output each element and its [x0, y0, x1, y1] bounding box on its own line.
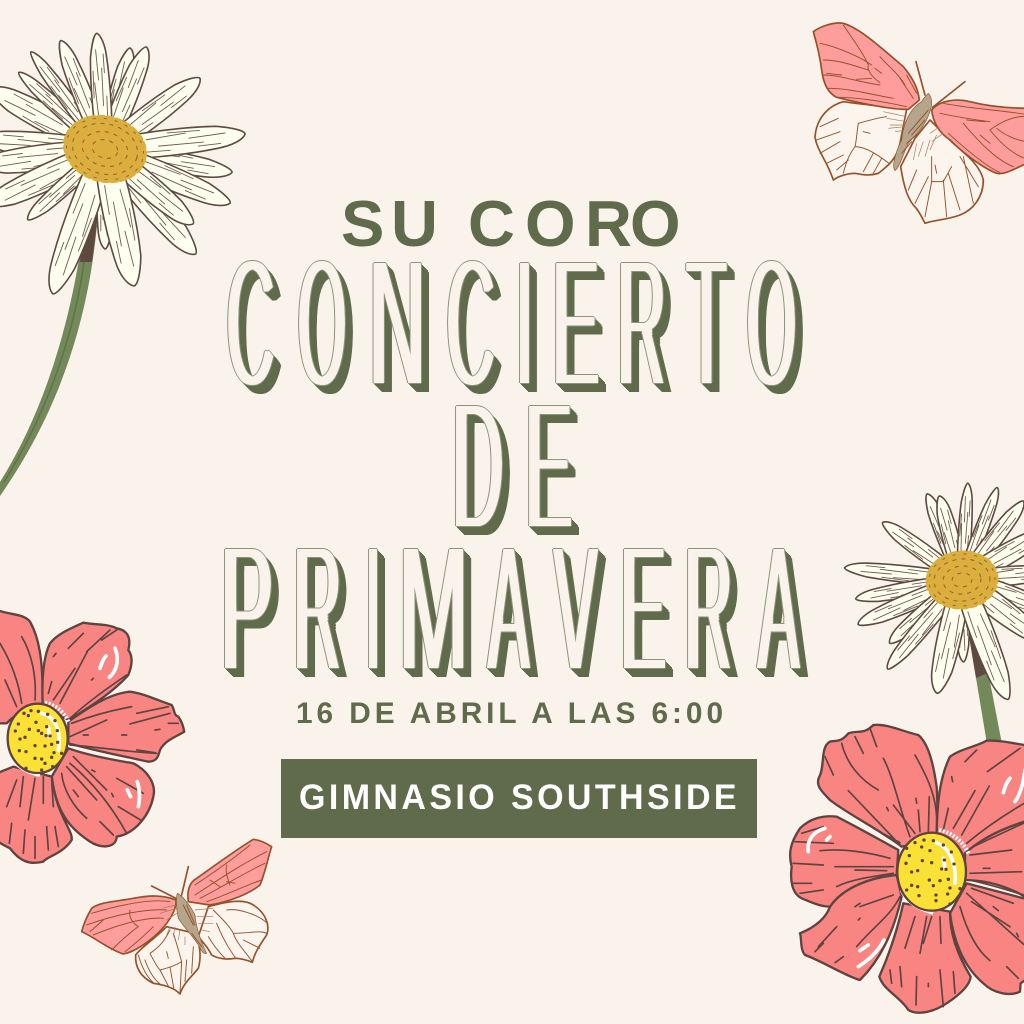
body: top butterfly: [894, 93, 932, 171]
date line: 16 DE ABRIL A LAS 6:00: [296, 697, 727, 730]
flower center: right daisy: [926, 550, 998, 610]
title line: CONCIERTO: C: [227, 221, 275, 426]
wing veins: bottom butterfly: [87, 845, 267, 993]
title line: PRIMAVERA: R: [685, 506, 732, 710]
wings: top butterfly: [813, 23, 1024, 223]
title line: PRIMAVERA: M: [399, 506, 468, 710]
title line: PRIMAVERA: E: [620, 508, 666, 711]
small heading: SU CORO: C: [468, 187, 515, 260]
fuzz: top butterfly: [883, 112, 943, 160]
daisy top left with stem: [0, 33, 247, 496]
title line: CONCIERTO: T: [687, 222, 726, 426]
daisy right with stem: [844, 483, 1024, 744]
red flower left: [0, 610, 184, 863]
flower center: top-left daisy: [58, 109, 152, 189]
petal veins: bottom-right flower: [793, 728, 1024, 1007]
title line: PRIMAVERA: I: [367, 507, 379, 710]
title line: CONCIERTO: O: [298, 220, 346, 425]
butterfly top right: [813, 23, 1024, 223]
fuzz: bottom butterfly: [160, 905, 213, 945]
highlights: bottom-right flower: [808, 770, 1024, 967]
title line: CONCIERTO: E: [552, 222, 599, 426]
title line: CONCIERTO: C: [447, 221, 495, 426]
small heading: SU CORO: U: [391, 187, 438, 260]
wings: bottom butterfly: [82, 839, 272, 994]
title line: PRIMAVERA: A: [758, 506, 799, 710]
small heading: SU CORO: R: [585, 187, 632, 260]
small heading: SU CORO: O: [525, 187, 576, 260]
small heading: SU CORO: O: [630, 187, 681, 260]
main title: CONCIERTO DE PRIMAVERA: [220, 220, 799, 711]
title line: CONCIERTO: I: [517, 220, 532, 425]
title line: CONCIERTO: [227, 220, 796, 426]
title line: DE: E: [525, 365, 572, 569]
title line: DE: [452, 364, 572, 569]
title line: CONCIERTO: O: [747, 222, 796, 426]
highlights: left flower: [100, 648, 139, 807]
petals: right daisy: [844, 483, 1024, 704]
red flower bottom right: [790, 725, 1024, 1013]
title line: PRIMAVERA: V: [554, 506, 597, 710]
title line: PRIMAVERA: R: [294, 506, 341, 710]
stem: top-left daisy: [0, 215, 98, 496]
antennae: top butterfly: [916, 62, 965, 107]
title line: PRIMAVERA: P: [220, 506, 273, 710]
petals: left flower: [0, 610, 184, 863]
flower center: bottom-right: [897, 830, 968, 913]
body: bottom butterfly: [176, 893, 207, 954]
title line: DE: D: [452, 364, 503, 569]
venue banner: GIMNASIO SOUTHSIDE: [299, 778, 740, 817]
title line: PRIMAVERA: [220, 506, 799, 711]
flower center: left: [8, 703, 68, 775]
title line: PRIMAVERA: A: [488, 506, 529, 710]
petal veins: left flower: [0, 630, 178, 858]
petals: bottom-right flower: [790, 725, 1024, 1013]
title line: CONCIERTO: R: [618, 221, 666, 426]
butterfly bottom left: [82, 839, 272, 994]
petals: top-left daisy: [0, 33, 247, 299]
title line: CONCIERTO: N: [369, 221, 425, 425]
small heading: SU CORO: S: [341, 187, 384, 260]
stem: right daisy: [968, 630, 1002, 744]
venue banner: [281, 759, 757, 838]
antennae: bottom butterfly: [152, 867, 188, 898]
wing veins: top butterfly: [817, 25, 1024, 217]
